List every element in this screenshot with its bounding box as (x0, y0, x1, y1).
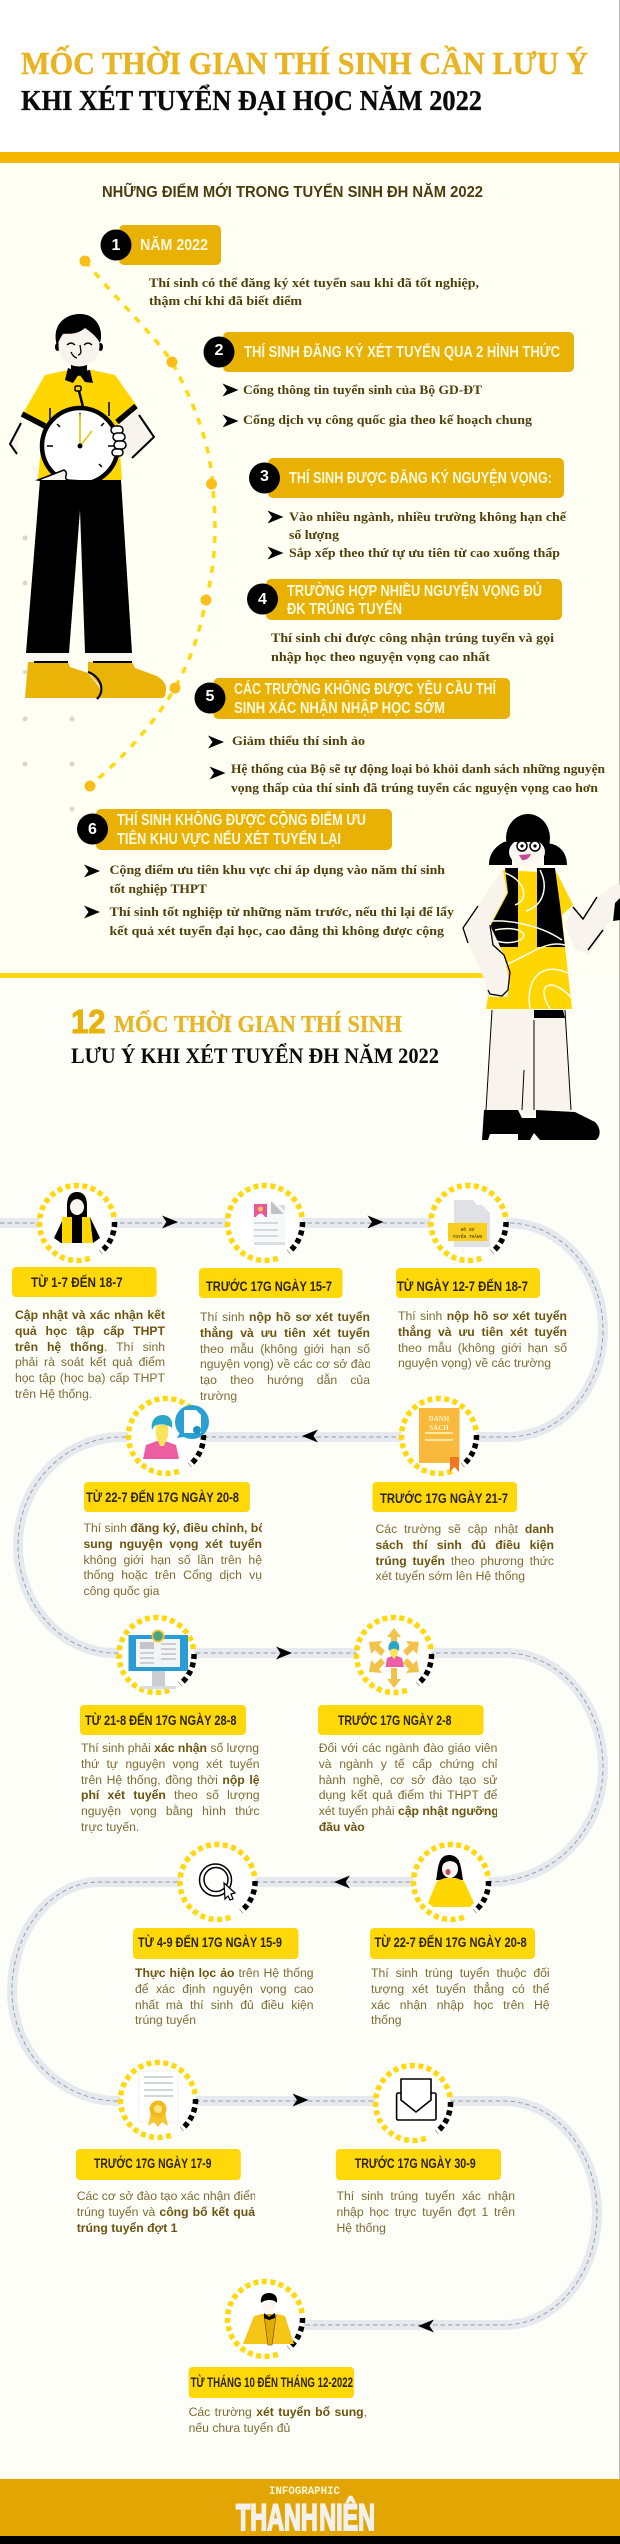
panel: point 6: THÍ SINH KHÔNG ĐƯỢC CỘNG ĐIỂM ƯU (117, 811, 366, 829)
footer band (0, 2479, 620, 2544)
milestone 6: trên Hệ thống, đồng thời nộp lệ (81, 1773, 260, 1787)
milestone 7: đầu vào (319, 1820, 365, 1834)
milestone 3: TUYỂN THẲNG (453, 1233, 483, 1240)
illustration: woman with glasses (463, 814, 620, 1140)
milestone 3: Thí sinh nộp hồ sơ xét tuyển (398, 1309, 567, 1323)
panel: point 4: ĐK TRÚNG TUYỂN (287, 600, 402, 618)
milestone 1: quả học tập cấp THPT (15, 1324, 165, 1338)
panel: point 2: Cổng dịch vụ công quốc gia theo kế hoạch chung (243, 412, 533, 427)
illustration: man holding stopwatch (9, 314, 166, 699)
milestone 5: SÁCH (429, 1424, 449, 1432)
panel: point 3: Vào nhiều ngành, nhiều trường không hạn chế (289, 509, 567, 524)
milestone 11: TRƯỚC 17G NGÀY 30-9 (355, 2154, 476, 2172)
dotted connector path (80, 256, 217, 792)
milestone 3: theo mẫu (không giới hạn số (398, 1341, 567, 1355)
milestone 9: TỪ 22-7 ĐẾN 17G NGÀY 20-8 (374, 1933, 527, 1951)
milestone 10: Các cơ sở đào tạo xác nhận điểm (77, 2189, 255, 2203)
section title: 12 milestones: MỐC THỜI GIAN THÍ SINH (114, 1009, 402, 1038)
milestone 12: TỪ THÁNG 10 ĐẾN THÁNG 12-2022 (191, 2373, 353, 2391)
milestone 5: TRƯỚC 17G NGÀY 21-7 (380, 1489, 508, 1507)
milestone 1: TỪ 1-7 ĐẾN 18-7 (31, 1273, 123, 1291)
panel: point 2: THÍ SINH ĐĂNG KÝ XÉT TUYỂN QUA 2 HÌNH THỨC (244, 343, 560, 361)
milestone 3: nguyện vọng) về các trường (398, 1356, 551, 1370)
milestone 2: tạo theo hướng dẫn của (200, 1373, 370, 1387)
milestone 4: không giới hạn số lần trên hệ (84, 1553, 262, 1567)
panel: point 4: TRƯỜNG HỢP NHIỀU NGUYỆN VỌNG ĐỦ (287, 582, 542, 600)
panel: point 6: tốt nghiệp THPT (110, 881, 207, 896)
milestone 4: công quốc gia (84, 1584, 159, 1598)
milestone 5: sách thí sinh đủ điều kiện (376, 1538, 554, 1552)
milestone 7: TRƯỚC 17G NGÀY 2-8 (338, 1711, 452, 1729)
milestone 1: trên hệ thống. Thí sinh (15, 1340, 165, 1354)
title: KHI XÉT TUYỂN ĐẠI HỌC NĂM 2022 (21, 85, 482, 117)
milestone 5: trúng tuyển theo phương thức (376, 1554, 554, 1568)
milestone 1 (12, 1185, 165, 1408)
milestone 6: Thí sinh phải xác nhận số lượng, (81, 1741, 260, 1755)
milestone 6 (80, 1617, 260, 1841)
milestone 2: trường (200, 1389, 237, 1403)
timeline direction arrows (162, 1216, 434, 2332)
milestone 12 (189, 2281, 367, 2445)
milestone 5: xét tuyển sớm lên Hệ thống (376, 1569, 525, 1583)
panel: point 2: Cổng thông tin tuyển sinh của Bộ GD-ĐT (243, 382, 482, 397)
panel: point 5: vọng thấp của thí sinh đã trúng tuyển các nguyện vọng cao hơn (231, 780, 599, 795)
title (21, 45, 588, 117)
milestone 8 (133, 1844, 314, 2036)
milestone 4 (84, 1398, 262, 1606)
panel: point 3: Sắp xếp theo thứ tự ưu tiên từ cao xuống thấp (289, 545, 560, 560)
milestone 8: để xác định nguyện vọng cao (135, 1982, 314, 1996)
panel: point 1: NĂM 2022 (140, 237, 208, 254)
milestone 8: Thực hiện lọc ảo trên Hệ thống (135, 1966, 314, 1980)
section title: 12 milestones: LƯU Ý KHI XÉT TUYỂN ĐH NĂM 2022 (71, 1043, 439, 1068)
panel: point 5: Hệ thống của Bộ sẽ tự động loại bỏ khỏi danh sách những nguyện (231, 761, 606, 776)
milestone 5: Các trường sẽ cập nhật danh (376, 1522, 554, 1536)
milestone 7: Đối với các ngành đào giáo viên (319, 1741, 497, 1755)
milestone 7: xét tuyển phải cập nhật ngưỡng (319, 1804, 497, 1818)
panel: point 1: 1 (112, 237, 121, 254)
panel: point 3: 3 (260, 468, 269, 485)
milestone 2: theo mẫu (không giới hạn số (200, 1342, 370, 1356)
milestone 8: nhất mà thí sinh đủ điều kiện (135, 1998, 314, 2012)
milestone 6: phí xét tuyển theo số lượng (81, 1788, 260, 1802)
panel: point 5 (194, 678, 606, 795)
panel: point 6: TIÊN KHU VỰC NẾU XÉT TUYỂN LẠI (117, 830, 341, 848)
section title: 12 milestones: 12 (71, 1003, 106, 1040)
panel: point 3: số lượng (289, 527, 340, 542)
milestone 11 (336, 2065, 515, 2244)
milestone 12: Các trường xét tuyển bổ sung, (189, 2405, 367, 2419)
milestone 9: tượng xét tuyển thẳng có thể (371, 1982, 550, 1996)
panel: point 4: Thí sinh chỉ được công nhận trúng tuyển và gọi (271, 630, 554, 645)
milestone 2: TRƯỚC 17G NGÀY 15-7 (206, 1277, 332, 1295)
panel: point 5: Giảm thiểu thí sinh ảo (232, 733, 365, 748)
milestone 1: phải rà soát kết quả điểm (15, 1355, 165, 1369)
milestone 5: DANH (429, 1415, 450, 1423)
milestone 1: học tập (học bạ) cấp THPT (15, 1371, 165, 1385)
milestone 5 (372, 1398, 554, 1592)
milestone 2: Thí sinh nộp hồ sơ xét tuyển (200, 1310, 370, 1324)
panel: point 4: nhập học theo nguyện vọng cao nhất (271, 649, 491, 664)
panel: point 6: Thí sinh tốt nghiệp từ những năm trước, nếu thi lại để lấy (110, 904, 455, 919)
header divider band (0, 152, 620, 163)
panel: point 3 (249, 458, 567, 560)
panel: point 5: SINH XÁC NHẬN NHẬP HỌC SỚM (234, 699, 445, 717)
milestone 10: trúng tuyển và công bố kết quả (77, 2205, 255, 2219)
panel: point 2: 2 (215, 342, 224, 359)
milestone 7 (318, 1617, 497, 1841)
milestone 3: thẳng và ưu tiên xét tuyển (398, 1325, 567, 1339)
panel: point 6: 6 (88, 821, 97, 838)
section title: 12 milestones (71, 1003, 439, 1068)
footer band: INFOGRAPHIC (269, 2486, 341, 2498)
milestone 3: TỪ NGÀY 12-7 ĐẾN 18-7 (397, 1277, 528, 1295)
milestone 11: Thí sinh trúng tuyển xác nhận (336, 2189, 515, 2203)
footer band: THANH NIÊN (236, 2496, 375, 2538)
milestone 6: trực tuyến. (81, 1820, 139, 1834)
milestone 10: trúng tuyển đợt 1 (77, 2221, 177, 2235)
panel: point 1: Thí sinh có thể đăng ký xét tuyển sau khi đã tốt nghiệp, (149, 275, 479, 290)
milestone 2 (199, 1185, 370, 1410)
milestone 7: dụng kết quả điểm thi THPT để (319, 1788, 497, 1802)
milestone 10 (76, 2062, 255, 2244)
section divider line (0, 973, 488, 978)
milestone 9: thống (371, 2013, 402, 2027)
panel: point 6: kết quả xét tuyển đại học, cao đẳng thì không được cộng (110, 923, 445, 938)
milestone 12: nếu chưa tuyển đủ (189, 2421, 290, 2435)
milestone 4: TỪ 22-7 ĐẾN 17G NGÀY 20-8 (86, 1488, 239, 1506)
milestone 6: TỪ 21-8 ĐẾN 17G NGÀY 28-8 (85, 1711, 237, 1729)
milestone 6: nguyện vọng bằng hình thức (81, 1804, 260, 1818)
milestone 1: trên Hệ thống. (15, 1387, 92, 1401)
milestone 9: Thí sinh trúng tuyển thuộc đối (371, 1966, 550, 1980)
title: MỐC THỜI GIAN THÍ SINH CẦN LƯU Ý (21, 45, 588, 81)
milestone 2: nguyện vọng) về các cơ sở đào (200, 1357, 370, 1371)
panel: point 4: 4 (258, 591, 267, 608)
milestone 4: sung nguyện vọng xét tuyển (84, 1537, 262, 1551)
timeline track (0, 1223, 603, 2325)
milestone 4: Thí sinh đăng ký, điều chỉnh, bổ (84, 1521, 262, 1535)
milestone 9 (370, 1844, 550, 2036)
panel: point 4 (247, 579, 562, 664)
milestone 3: HỒ SƠ (461, 1226, 475, 1233)
panel: point 5: CÁC TRƯỜNG KHÔNG ĐƯỢC YÊU CẦU THÍ (234, 680, 497, 698)
section heading: new points: NHỮNG ĐIỂM MỚI TRONG TUYỂN SINH ĐH NĂM 2022 (102, 181, 483, 201)
panel: point 3: THÍ SINH ĐƯỢC ĐĂNG KÝ NGUYỆN VỌNG: (289, 469, 552, 487)
milestone 11: nhập học trực tuyến đợt 1 trên (336, 2205, 515, 2219)
milestone 8: TỪ 4-9 ĐẾN 17G NGÀY 15-9 (138, 1933, 282, 1951)
milestone 7: hành nghề, cơ sở đào tạo sử (319, 1773, 497, 1787)
milestone 1: Cập nhật và xác nhận kết (15, 1308, 165, 1322)
panel: point 6: Cộng điểm ưu tiên khu vực chỉ áp dụng vào năm thí sinh (110, 862, 446, 877)
milestone 11: Hệ thống (336, 2221, 386, 2235)
panel: point 5: 5 (206, 688, 215, 705)
milestone 6: thứ tự nguyện vọng xét tuyển (81, 1757, 260, 1771)
panel: point 2 (204, 332, 574, 428)
panel: point 6 (77, 809, 455, 938)
milestone 9: xác nhận nhập học trên Hệ (371, 1998, 550, 2012)
milestone 8: trúng tuyển (135, 2013, 196, 2027)
milestone 10: TRƯỚC 17G NGÀY 17-9 (94, 2154, 212, 2172)
panel: point 1 (100, 225, 479, 308)
milestone 3 (396, 1185, 567, 1379)
milestone 2: thẳng và ưu tiên xét tuyển (200, 1326, 370, 1340)
milestone 4: thống hoặc trên Cổng dịch vụ (84, 1568, 262, 1582)
background dot grid (22, 536, 74, 812)
milestone 7: và ngành y tế cấp chứng chỉ (319, 1757, 497, 1771)
panel: point 1: thậm chí khi đã biết điểm (149, 293, 302, 308)
